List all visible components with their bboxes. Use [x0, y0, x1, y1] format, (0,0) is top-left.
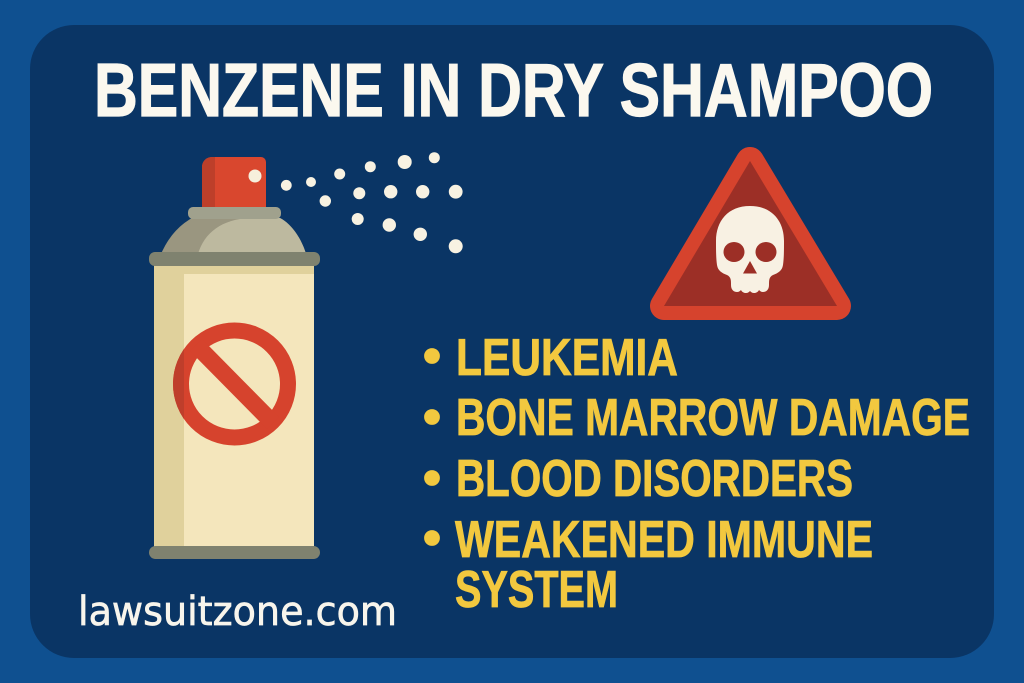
can shoulder rim [149, 252, 320, 266]
warning triangle inner fill [664, 161, 837, 306]
can nozzle [202, 157, 266, 207]
can dome [161, 218, 306, 254]
icon: warning triangle with skull [664, 161, 837, 306]
bullet item: weakened immune system [424, 511, 873, 619]
website footer: lawsuitzone.com [78, 589, 397, 635]
icon: prohibition sign [181, 330, 288, 438]
spray particles [281, 152, 463, 253]
warning triangle outer border [664, 161, 837, 306]
can base rim [149, 546, 320, 559]
health effects list [424, 329, 970, 619]
can collar [188, 207, 281, 219]
bullet item: weakened immune system: WEAKENED IMMUNE [455, 511, 873, 569]
bullet item: weakened immune system: SYSTEM [455, 561, 618, 619]
bullet item: blood disorders: BLOOD DISORDERS [456, 450, 853, 508]
can body [154, 264, 314, 548]
icon: spray can [149, 157, 320, 559]
skull [716, 206, 784, 293]
bullet item: leukemia: LEUKEMIA [456, 329, 678, 387]
